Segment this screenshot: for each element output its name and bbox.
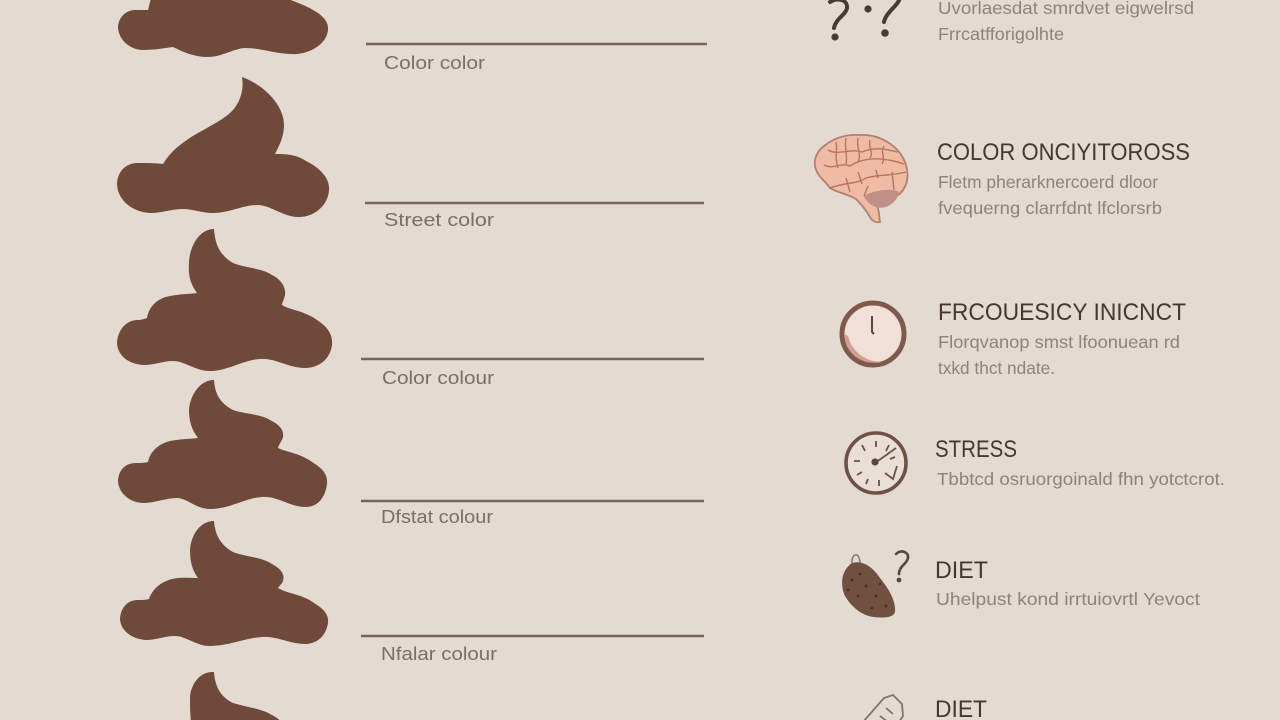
icon: clock [842,303,904,365]
text: color description: fvequerng clarrfdnt lfclorsrb [938,198,1162,218]
text: first factor description [938,0,1194,44]
text: frequency description: Florqvanop smst lfoonuean rd [938,332,1180,352]
icon: brain [815,135,908,222]
stool shape 2 [117,77,329,217]
row label 2: Street color [384,210,494,230]
stool shape 4 [118,380,327,509]
heading: diet: DIET [935,557,988,584]
icon: food block [863,695,903,720]
text: color description: Fletm pherarknercoerd dloor [938,172,1158,192]
icon: question marks [830,0,900,41]
left column: stool shapes and color rows [117,0,707,720]
text: diet description: Uhelpust kond irrtuiovrtl Yevoct [936,589,1200,609]
row label 1: Color color [384,53,485,73]
stool shape 5 [120,521,328,646]
row line 5 [361,635,704,637]
heading: stress: STRESS [935,436,1017,463]
stool shape 1 [118,0,328,57]
stool shape 3 [117,229,332,371]
icon: fruit with question mark [842,551,908,617]
text: stress description: Tbbtcd osruorgoinald fhn yotctcrot. [937,469,1225,489]
text: first factor description: Frrcatfforigolhte [938,24,1064,44]
row label 3: Color colour [382,368,494,388]
icon: stress gauge [846,433,906,493]
row line 2 [365,202,704,204]
row line 3 [361,358,704,360]
text: color description [938,172,1162,218]
heading: frequency: FRCOUESICY INICNCT [938,299,1186,326]
row label 4: Dfstat colour [381,507,493,527]
heading: color: COLOR ONCIYITOROSS [937,139,1190,166]
text: frequency description: txkd thct ndate. [938,358,1055,378]
row label 5: Nfalar colour [381,644,497,664]
text: frequency description [938,332,1180,378]
right column: factors [815,0,1225,720]
row line 1 [366,43,707,45]
row line 4 [361,500,704,502]
stool shape 6 [190,672,281,720]
